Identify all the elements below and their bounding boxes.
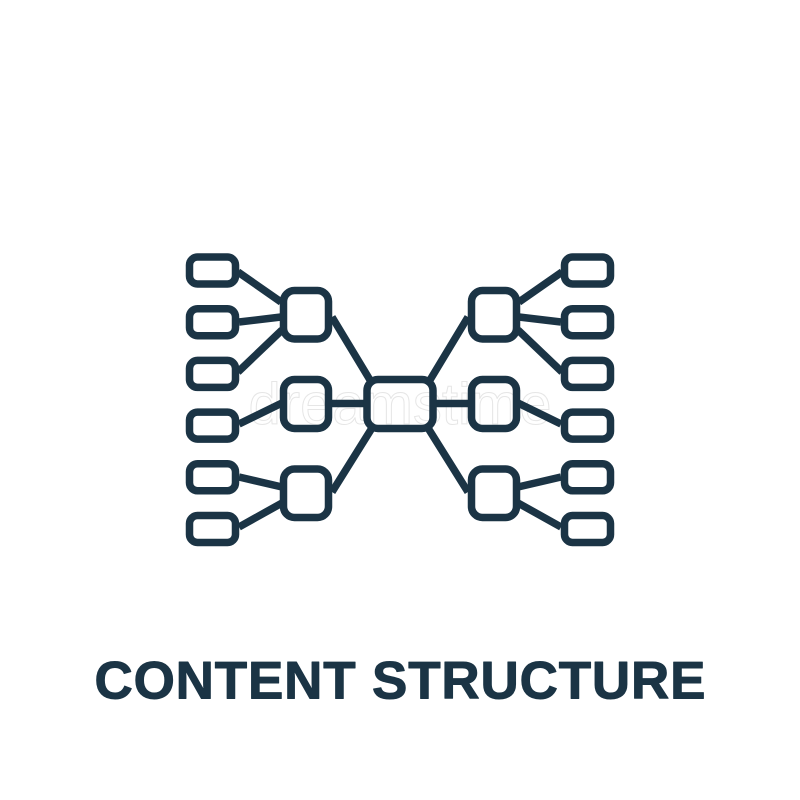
connectors: left side <box>238 272 372 527</box>
right leaf nodes <box>564 257 610 542</box>
watermark: dreamstime <box>249 372 551 437</box>
connectors: right side <box>428 272 562 527</box>
title: CONTENT STRUCTURE <box>94 652 706 710</box>
left middle nodes <box>284 290 328 518</box>
icon: content structure tree <box>190 257 610 542</box>
right middle nodes <box>472 290 516 518</box>
central node <box>367 380 433 428</box>
left leaf nodes <box>190 257 236 542</box>
